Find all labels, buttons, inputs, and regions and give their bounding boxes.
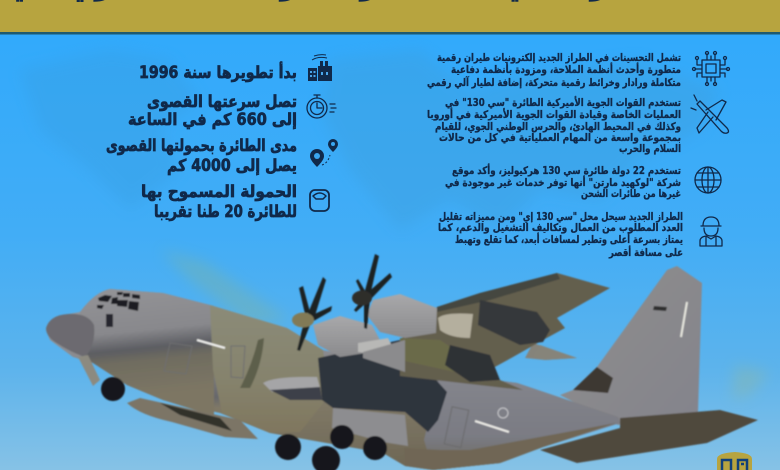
dark blister shade	[270, 387, 322, 400]
lower engine fairing	[363, 340, 405, 372]
paragraph: users: تستخدم القوات الجوية الأميركية الطائرة "سي 130" في	[445, 96, 681, 109]
icon: worker	[700, 217, 722, 246]
olive camo band	[210, 305, 330, 433]
nose gear wheel	[101, 377, 125, 401]
paragraph: new model	[438, 211, 683, 259]
propeller one	[292, 277, 332, 351]
aircraft	[46, 254, 758, 470]
underwing pod	[525, 343, 577, 360]
paragraph: users	[427, 96, 681, 155]
panel: detail paragraphs right column	[427, 52, 683, 259]
rear fuselage	[424, 374, 620, 470]
nacelle lower cowl	[358, 338, 393, 354]
main gear wheels	[275, 425, 387, 470]
inner engine nacelle	[313, 316, 380, 357]
fact: range: مدى الطائرة بحمولتها القصوى	[106, 136, 297, 156]
front fuselage section	[80, 289, 214, 416]
paragraph: operators: غيرها من طائرات الشحن	[581, 188, 681, 200]
fact: payload	[141, 182, 297, 222]
icon: stopwatch	[307, 95, 336, 118]
light lower fairing	[332, 408, 408, 446]
radome nose	[46, 314, 94, 357]
paragraph: users: وكذلك في المحيط الهادئ، والحرس الوطني الجوي، للقيام	[435, 121, 681, 133]
wing nacelle cap	[438, 314, 473, 338]
paragraph: upgrades: متطورة وأحدث أنظمة الملاحة، ومزودة بأنظمة دفاعية	[451, 62, 681, 76]
paragraph: upgrades: متكاملة ورادار وخرائط رقمية متحركة، إضافة لطيار آلي رقمي	[427, 76, 681, 89]
fact: payload: للطائرة 20 طنا تقريبا	[154, 202, 297, 222]
paragraph: users: السلام والحرب	[619, 143, 681, 155]
panel: key facts left column	[106, 62, 297, 222]
cockpit windows	[97, 292, 140, 311]
paragraph: upgrades: تشمل التحسينات في الطراز الجديد إلكترونيات طيران رقمية	[437, 52, 681, 64]
fuel pod under fuselage	[127, 398, 258, 439]
propeller two	[352, 254, 392, 329]
brand logo	[717, 452, 752, 470]
white fuselage stripe	[197, 340, 225, 348]
underwing pylon	[533, 345, 577, 360]
fact: development year: بدأ تطويرها سنة 1996	[139, 62, 297, 83]
fact: top speed	[128, 92, 297, 130]
icon: route pins	[310, 139, 338, 167]
paragraph: new model: الطراز الجديد سيحل محل "سي 130 إي" ومن مميزاته تقليل	[439, 211, 683, 223]
paragraph: users: بمجموعة واسعة من المهام العملياتية في كل من حالات	[439, 132, 681, 144]
fact: range: يصل إلى 4000 كم	[167, 156, 297, 175]
horizontal stabilizer	[540, 410, 758, 463]
grey blister	[263, 377, 320, 392]
dark underwing panel	[318, 340, 447, 432]
outer nacelle	[367, 294, 437, 338]
world map backdrop	[20, 50, 770, 400]
paragraph: upgrades	[427, 52, 681, 89]
fact: top speed: إلى 660 كم في الساعة	[128, 110, 297, 130]
paragraph: operators: تستخدم 22 دولة طائرة سي 130 هركيوليز، وأكد موقع	[452, 163, 681, 177]
rear door	[444, 407, 469, 447]
fact: top speed: تصل سرعتها القصوى	[147, 92, 297, 112]
icon: factory	[308, 55, 332, 81]
paragraph: new model: يمتاز بسرعة أعلى وتطير لمسافات أبعد، كما تقلع وتهبط	[455, 232, 683, 246]
fuselage	[46, 289, 620, 470]
tail fin	[560, 266, 702, 425]
paragraph: new model: على مسافة أقصر	[608, 245, 683, 259]
fact: range	[106, 136, 297, 175]
rear white stripe	[475, 421, 509, 432]
side window	[106, 314, 113, 327]
nose strut	[78, 355, 100, 386]
icon: circuit chip	[692, 52, 730, 86]
stripes on fuselage side	[240, 338, 264, 388]
round insignia	[498, 408, 508, 418]
icon: weight scale	[310, 190, 329, 211]
icon: airplane	[691, 95, 728, 133]
paragraph: operators	[445, 163, 681, 200]
fact: payload: الحمولة المسموح بها	[141, 182, 297, 202]
lower rear tan	[404, 423, 616, 470]
header band	[0, 0, 780, 34]
icon: globe	[695, 167, 721, 193]
paragraph: new model: العدد المطلوب من العمال وتكاليف التشغيل والدعم، كما	[438, 222, 683, 234]
door outlines	[164, 343, 245, 378]
far wing with camouflage	[400, 273, 610, 390]
paragraph: users: العمليات الخاصة وقيادة القوات الجوية الأميركية في أوروبا	[427, 107, 681, 121]
paragraph: operators: شركة "لوكهيد مارتن" أنها توفر خدمات غير موجودة في	[445, 175, 681, 189]
